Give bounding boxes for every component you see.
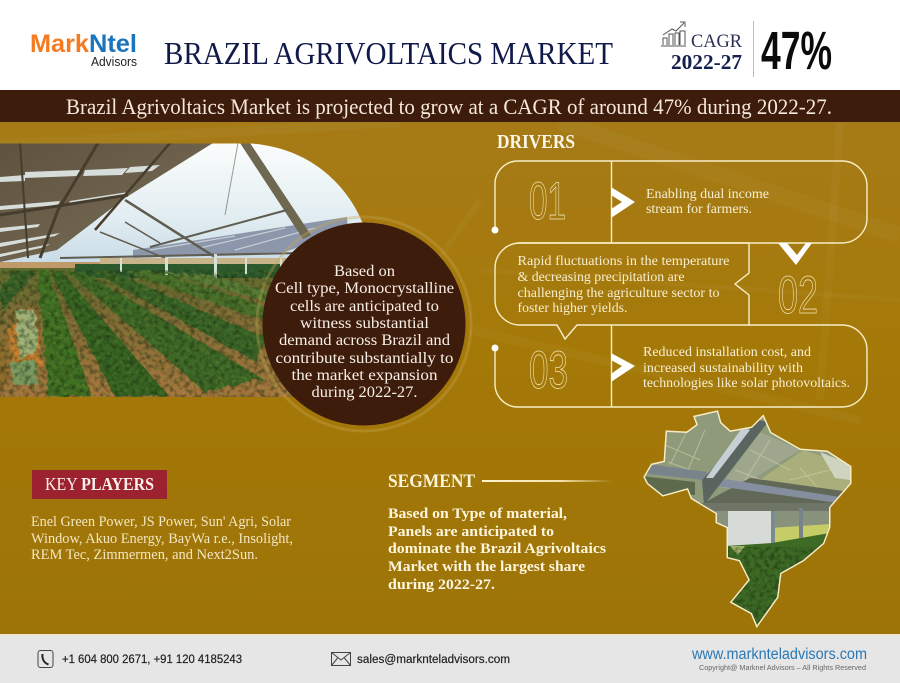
icon: growth chart (661, 22, 686, 46)
copyright: Copyright@ Marknel Advisors – All Rights Reserved (699, 665, 866, 672)
driver 03: increased sustainability with (643, 361, 803, 376)
segment text: Market with the largest share (388, 559, 586, 575)
driver 02: & decreasing precipitation are (518, 270, 684, 285)
title: BRAZIL AGRIVOLTAICS MARKET (164, 35, 613, 71)
key players list: REM Tec, Zimmermen, and Next2Sun. (31, 547, 258, 563)
logo: Ntel (89, 30, 137, 58)
callout circle: cell type: cells are anticipated to (290, 298, 439, 315)
key players badge (32, 470, 167, 499)
CAGR value: 47% (761, 21, 832, 81)
driver 02 (495, 243, 818, 339)
heading: drivers: DRIVERS (497, 131, 575, 153)
website: www.marknteladvisors.com (691, 646, 867, 663)
callout circle: cell type: contribute substantially to (276, 350, 454, 367)
summary band (0, 90, 900, 122)
icon: envelope (332, 652, 350, 666)
phone numbers: +1 604 800 2671, +91 120 4185243 (62, 654, 242, 666)
callout circle: cell type (257, 217, 471, 431)
logo (30, 30, 137, 69)
callout circle: cell type: demand across Brazil and (279, 332, 450, 349)
callout circle: cell type: during 2022-27. (312, 384, 418, 401)
callout circle: cell type: Based on (334, 263, 395, 280)
segment text: during 2022-27. (388, 577, 495, 593)
driver 02: foster higher yields. (518, 301, 628, 316)
driver 03: 03 (529, 341, 568, 400)
summary band: Brazil Agrivoltaics Market is projected to grow at a CAGR of around 47% during 2022-27. (66, 94, 832, 119)
segment text: dominate the Brazil Agrivoltaics (388, 541, 606, 557)
header (30, 21, 832, 81)
driver 03 (492, 325, 867, 407)
segment heading: SEGMENT (388, 471, 475, 492)
key players list (31, 514, 293, 563)
driver 02: challenging the agriculture sector to (518, 286, 720, 301)
segment text: Based on Type of material, (388, 506, 567, 522)
callout circle: cell type: the market expansion (292, 367, 438, 384)
email: sales@marknteladvisors.com (357, 654, 510, 666)
driver 01: Enabling dual income (646, 187, 769, 202)
segment text (388, 506, 606, 593)
driver 01: 01 (529, 172, 566, 231)
driver 01: stream for farmers. (646, 202, 752, 217)
callout circle: cell type: Cell type, Monocrystalline (275, 280, 454, 297)
key players badge: KEY PLAYERS (45, 474, 154, 494)
driver 03: Reduced installation cost, and (643, 345, 811, 360)
map of Brazil with solar panel photo (640, 410, 855, 630)
driver 02: Rapid fluctuations in the temperature (518, 254, 730, 269)
driver 02: 02 (778, 266, 818, 325)
logo: Mark (30, 30, 89, 58)
key players list: Enel Green Power, JS Power, Sun' Agri, Solar (31, 514, 291, 530)
driver 03: technologies like solar photovoltaics. (643, 376, 850, 391)
icon: phone (38, 650, 53, 668)
segment text: Panels are anticipated to (388, 524, 554, 540)
footer (0, 634, 900, 683)
CAGR period: 2022-27 (671, 50, 742, 74)
driver 01 (492, 161, 867, 243)
key players list: Window, Akuo Energy, BayWa r.e., Insolight, (31, 531, 293, 547)
logo: Advisors (91, 54, 137, 69)
callout circle: cell type: witness substantial (300, 315, 429, 332)
CAGR label: CAGR (691, 31, 742, 52)
photo: solar panels above crop rows (0, 143, 365, 397)
